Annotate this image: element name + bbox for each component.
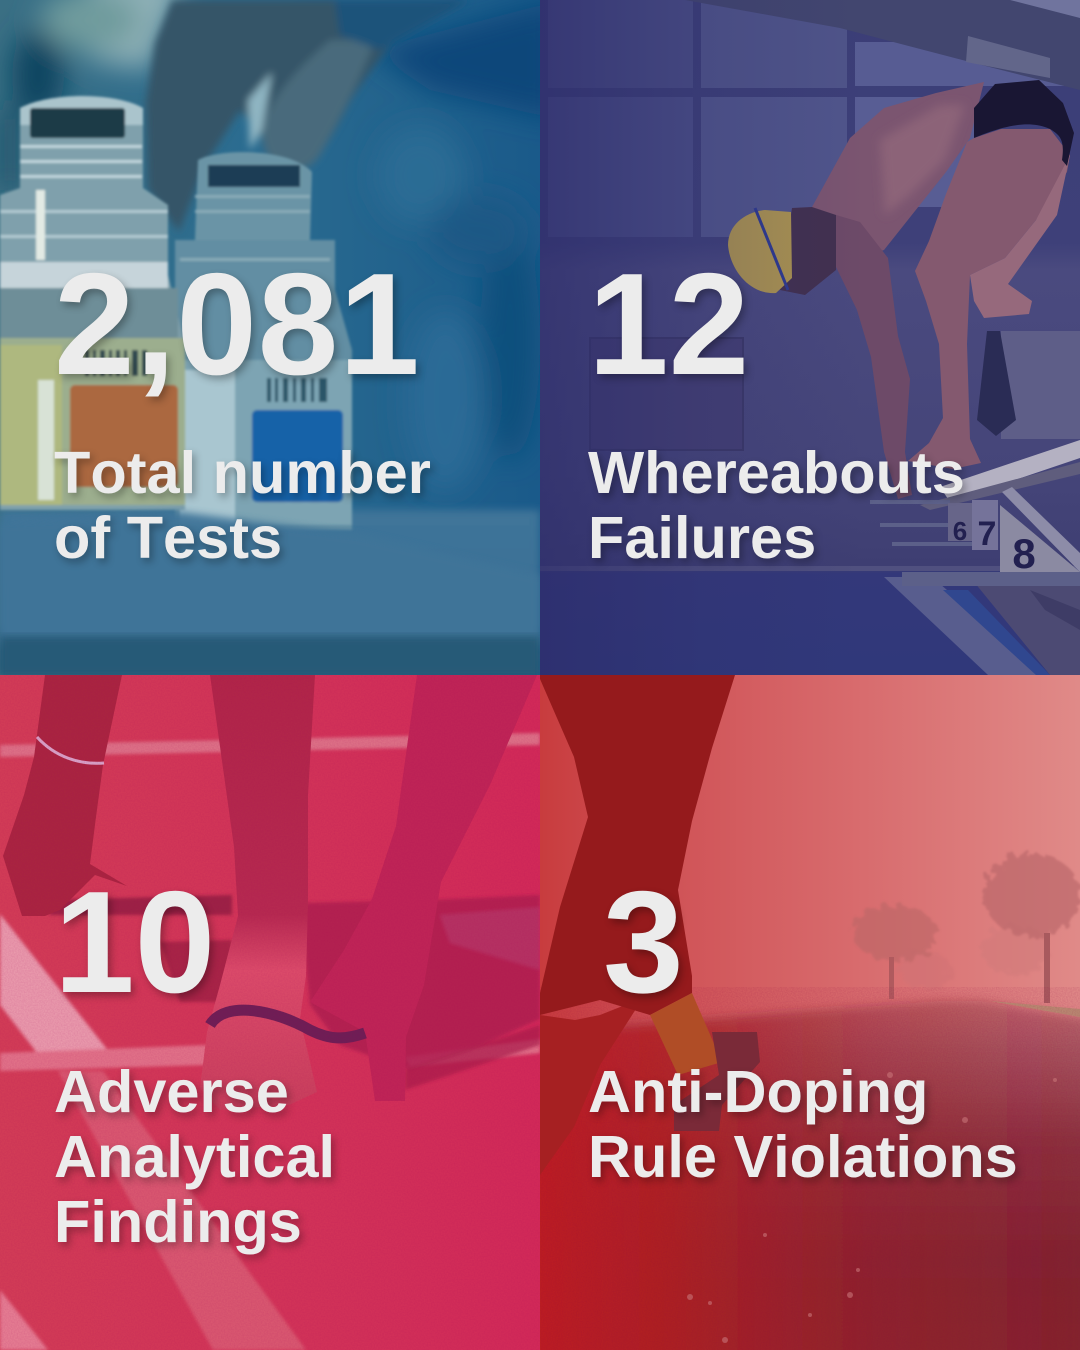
swim shorts	[974, 80, 1074, 166]
label: whereabouts failures: Whereabouts	[588, 439, 965, 506]
photo: sprinter hands on track with pink overlay	[0, 675, 540, 1350]
surface in front of bottles	[0, 510, 540, 675]
lane number 8: 8	[1012, 530, 1036, 577]
right arm and hand	[310, 675, 537, 1101]
label: total number of tests: of Tests	[54, 504, 282, 571]
bottle B	[175, 152, 352, 530]
stat number: 12: 12	[588, 243, 749, 405]
ankle sock	[650, 993, 722, 1075]
label: anti-doping rule violations: Rule Violations	[588, 1123, 1018, 1190]
center arm and hand	[200, 675, 317, 1110]
road	[520, 1001, 1080, 1350]
label: whereabouts failures: Failures	[588, 504, 816, 571]
hand and finger	[146, 0, 470, 232]
label: adverse analytical findings: Analytical	[54, 1123, 335, 1190]
lane number 6: 6	[953, 516, 967, 546]
stat number: 2,081: 2,081	[54, 243, 420, 405]
label: total number of tests	[54, 439, 435, 571]
bottom shelf	[0, 512, 540, 645]
arm	[836, 215, 912, 499]
far trees	[899, 950, 951, 990]
near tree right	[984, 853, 1080, 1003]
lane number 7: 7	[978, 515, 996, 553]
raised calf and foot	[970, 155, 1070, 318]
runner leg	[540, 675, 735, 1015]
label: whereabouts failures	[588, 439, 969, 571]
label: anti-doping rule violations: Anti-Doping	[588, 1058, 928, 1125]
torso	[812, 82, 984, 262]
bottle A	[0, 96, 185, 510]
panel: adverse analytical findings	[0, 675, 540, 1350]
windows	[548, 0, 693, 88]
roof truss	[685, 0, 1080, 90]
swimmer	[812, 82, 1070, 499]
bracelet	[37, 737, 104, 763]
panel: whereabouts failures	[540, 0, 1080, 675]
label: adverse analytical findings: Findings	[54, 1188, 302, 1255]
goggle strap	[755, 208, 788, 290]
standing leg	[908, 129, 1070, 469]
road speckles	[687, 1072, 1057, 1343]
photo: swimmer on starting block with purple overlay	[540, 0, 1080, 675]
lane lines	[0, 733, 540, 1350]
starting block	[870, 440, 1080, 630]
label: adverse analytical findings	[54, 1058, 338, 1262]
stat number: 10: 10	[54, 861, 215, 1023]
stat number: 3: 3	[603, 861, 684, 1023]
back leg and shoe	[540, 998, 643, 1175]
neck and face	[780, 207, 836, 295]
label: anti-doping rule violations	[588, 1058, 1021, 1190]
wall panel	[590, 338, 743, 450]
track shadows	[50, 895, 540, 1090]
pool deck and tiles	[884, 577, 1045, 675]
left hand	[3, 675, 127, 916]
near tree left	[853, 905, 937, 999]
wrist band	[210, 1010, 365, 1038]
label: total number of tests: Total number	[54, 439, 431, 506]
label: adverse analytical findings: Adverse	[54, 1058, 289, 1125]
photo: runner on foggy road with red overlay	[540, 675, 1080, 1350]
swim cap	[728, 210, 792, 293]
photo: sample bottles with blue overlay	[0, 0, 540, 675]
panel: total number of tests	[0, 0, 540, 675]
running shoe	[674, 1032, 760, 1131]
netting and gear	[1001, 331, 1080, 439]
panel: anti-doping rule violations	[540, 675, 1080, 1350]
